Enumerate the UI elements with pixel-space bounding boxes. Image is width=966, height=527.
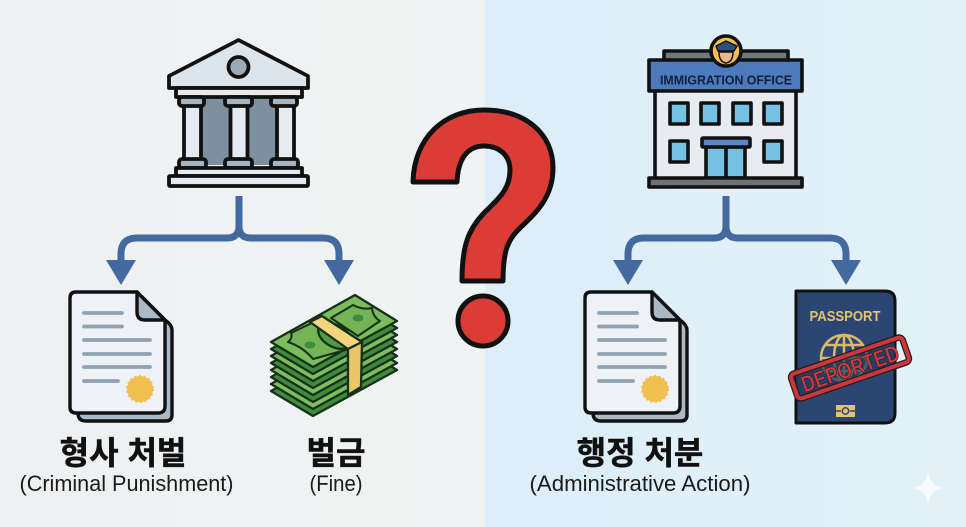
arrow: right branching connector [613,196,861,285]
panel: right background [485,0,966,527]
icon: stack of money [271,295,397,416]
icon: chip [836,405,855,417]
icon: immigration office building [649,36,802,187]
text: fine label [307,435,365,496]
text: administrative action label: (Administrative Action) [530,471,750,496]
text: immigration office sign: IMMIGRATION OFFICE [660,72,792,88]
icon: administrative document [585,292,687,421]
text: administrative action label [530,435,750,496]
icon: red question mark [413,110,553,346]
arrow: left branching connector [106,196,354,285]
icon: courthouse [169,40,308,186]
text: criminal punishment label [20,435,234,496]
icon: criminal document [70,292,172,421]
text: criminal punishment label: (Criminal Punishment) [20,471,234,496]
stamp: deported: DEPORTED [798,340,903,397]
text: fine label: 벌금 [307,435,365,471]
icon: deported passport [790,291,910,423]
text: passport title: PASSPORT [810,308,880,325]
stamp backing: darkens the globe inside the stamp [796,342,895,395]
text: administrative action label: 행정 처분 [577,435,703,471]
panel: left background [0,0,485,527]
text: criminal punishment label: 형사 처벌 [60,435,186,471]
icon: sparkle watermark [912,471,944,504]
text: fine label: (Fine) [310,471,362,496]
icon: globe [821,335,867,381]
